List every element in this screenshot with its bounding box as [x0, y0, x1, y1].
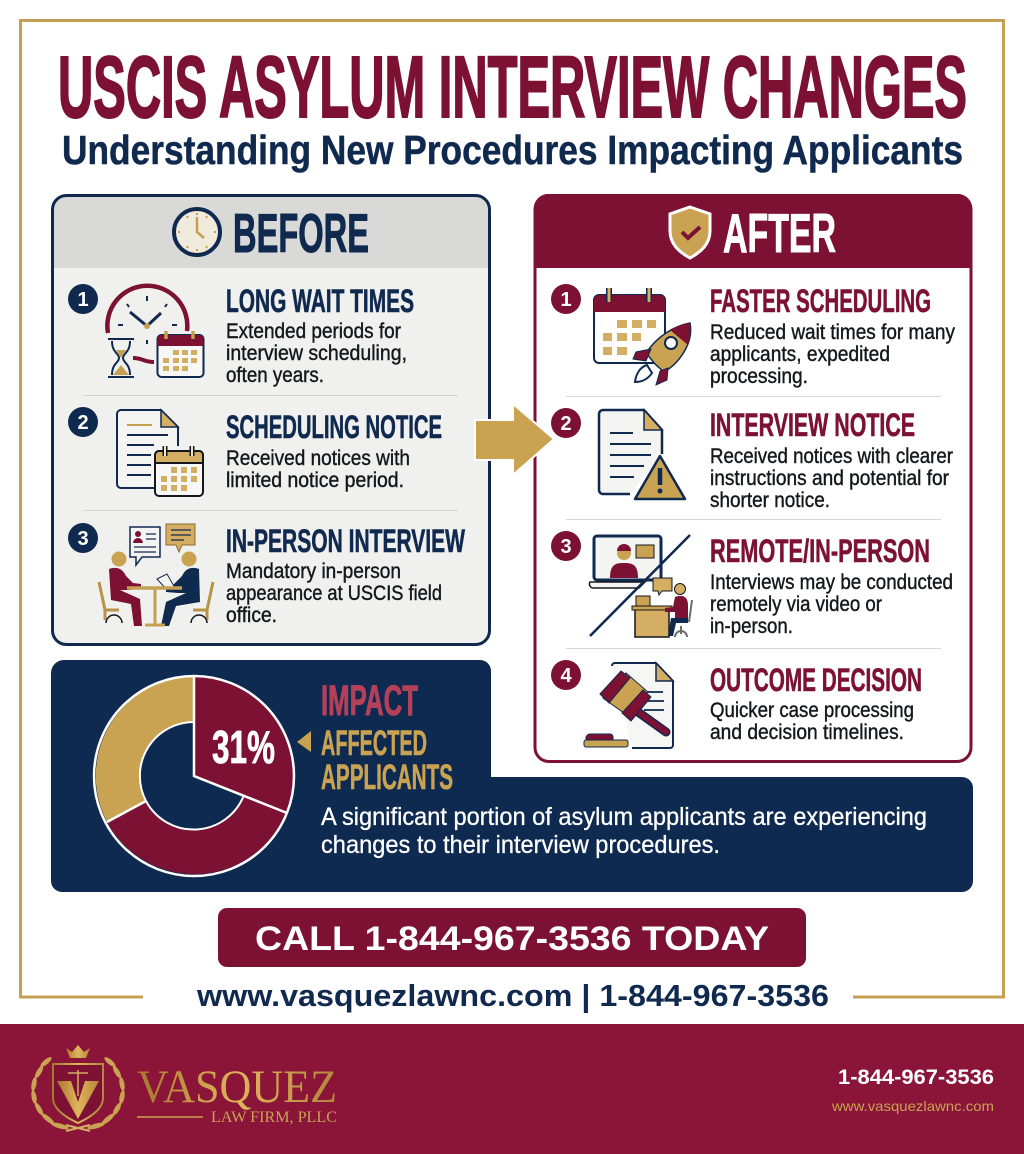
heading and description: Received notices with	[226, 447, 410, 470]
affected applicants label	[321, 724, 453, 797]
before heading: BEFORE	[233, 202, 369, 264]
item: in-person interview: 3	[77, 528, 89, 550]
heading and description: SCHEDULING NOTICE	[226, 409, 442, 445]
percentage label: 31%	[212, 721, 275, 773]
after heading: AFTER	[723, 202, 836, 264]
footer website: www.vasquezlawnc.com	[831, 1098, 994, 1114]
item: outcome decision: 4	[560, 665, 572, 687]
impact heading: IMPACT	[321, 677, 418, 725]
item: long wait times	[68, 283, 414, 387]
heading and description: Interviews may be conducted	[710, 571, 953, 594]
heading and description: Mandatory in-person	[226, 560, 401, 583]
heading and description: appearance at USCIS field	[226, 582, 442, 605]
after header band	[534, 194, 972, 268]
heading and description: IN-PERSON INTERVIEW	[226, 523, 466, 559]
item: remote or in-person: 3	[560, 536, 572, 558]
donut chart: 31 percent	[94, 676, 294, 876]
website and phone line: www.vasquezlawnc.com | 1-844-967-3536	[196, 978, 829, 1013]
item: in-person interview	[68, 523, 466, 627]
heading and description	[226, 409, 442, 492]
heading and description	[710, 407, 953, 512]
panel: impact	[51, 660, 973, 892]
before header band	[52, 196, 490, 268]
item: outcome decision	[551, 660, 922, 748]
heading and description: LONG WAIT TIMES	[226, 283, 414, 319]
call to action button: CALL 1-844-967-3536 TODAY	[255, 920, 769, 958]
icon: two people at table	[99, 524, 213, 626]
icon: shield with check	[670, 207, 710, 258]
logo: vasquez law firm	[30, 1045, 337, 1131]
heading and description: Quicker case processing	[710, 699, 914, 722]
affected applicants label: AFFECTED	[321, 724, 427, 763]
footer band	[0, 1024, 1024, 1154]
item: interview notice: 2	[560, 413, 572, 435]
affected applicants label: APPLICANTS	[321, 758, 453, 797]
icon: calendar and rocket	[594, 288, 691, 385]
impact description	[321, 803, 927, 859]
heading and description: REMOTE/IN-PERSON	[710, 533, 930, 569]
heading and description	[710, 662, 922, 744]
panel: before	[52, 196, 490, 644]
heading and description: shorter notice.	[710, 489, 830, 512]
heading and description	[226, 523, 466, 627]
firm suffix: LAW FIRM, PLLC	[211, 1109, 337, 1126]
icon: clock, hourglass and calendar	[107, 286, 204, 377]
firm name: VASQUEZ	[137, 1061, 337, 1113]
heading and description: Received notices with clearer	[710, 445, 953, 468]
heading and description: processing.	[710, 365, 808, 388]
item: faster scheduling: 1	[560, 289, 572, 311]
item: scheduling notice	[68, 407, 442, 496]
heading and description: remotely via video or	[710, 593, 882, 616]
heading and description: INTERVIEW NOTICE	[710, 407, 915, 443]
icon: clock	[174, 209, 220, 255]
heading and description: and decision timelines.	[710, 721, 904, 744]
panel: after	[534, 194, 972, 762]
heading and description	[226, 283, 414, 387]
impact description: changes to their interview procedures.	[321, 831, 720, 859]
icon: crest	[30, 1045, 126, 1131]
heading and description: applicants, expedited	[710, 343, 890, 366]
heading and description: Extended periods for	[226, 320, 401, 343]
item: remote or in-person	[551, 531, 953, 638]
footer phone: 1-844-967-3536	[838, 1066, 994, 1089]
pointer arrow	[297, 731, 311, 752]
item: faster scheduling	[551, 283, 955, 388]
heading and description: Reduced wait times for many	[710, 321, 955, 344]
icon: document and calendar	[117, 410, 203, 496]
icon: laptop, desk and divider	[589, 535, 692, 637]
heading and description: limited notice period.	[226, 469, 404, 492]
arrow: before to after	[475, 404, 554, 475]
item: long wait times: 1	[77, 289, 89, 311]
heading and description	[710, 533, 953, 638]
icon: gavel and document	[584, 663, 673, 748]
impact description: A significant portion of asylum applicants are experiencing	[321, 803, 927, 831]
item: interview notice	[551, 407, 953, 512]
heading and description: interview scheduling,	[226, 342, 407, 365]
item: scheduling notice: 2	[77, 412, 89, 434]
heading and description: in-person.	[710, 615, 793, 638]
call to action button	[218, 908, 806, 967]
heading and description: instructions and potential for	[710, 467, 949, 490]
heading and description: office.	[226, 604, 277, 627]
heading and description	[710, 283, 955, 388]
icon: document and warning triangle	[599, 410, 685, 499]
heading and description: often years.	[226, 364, 324, 387]
